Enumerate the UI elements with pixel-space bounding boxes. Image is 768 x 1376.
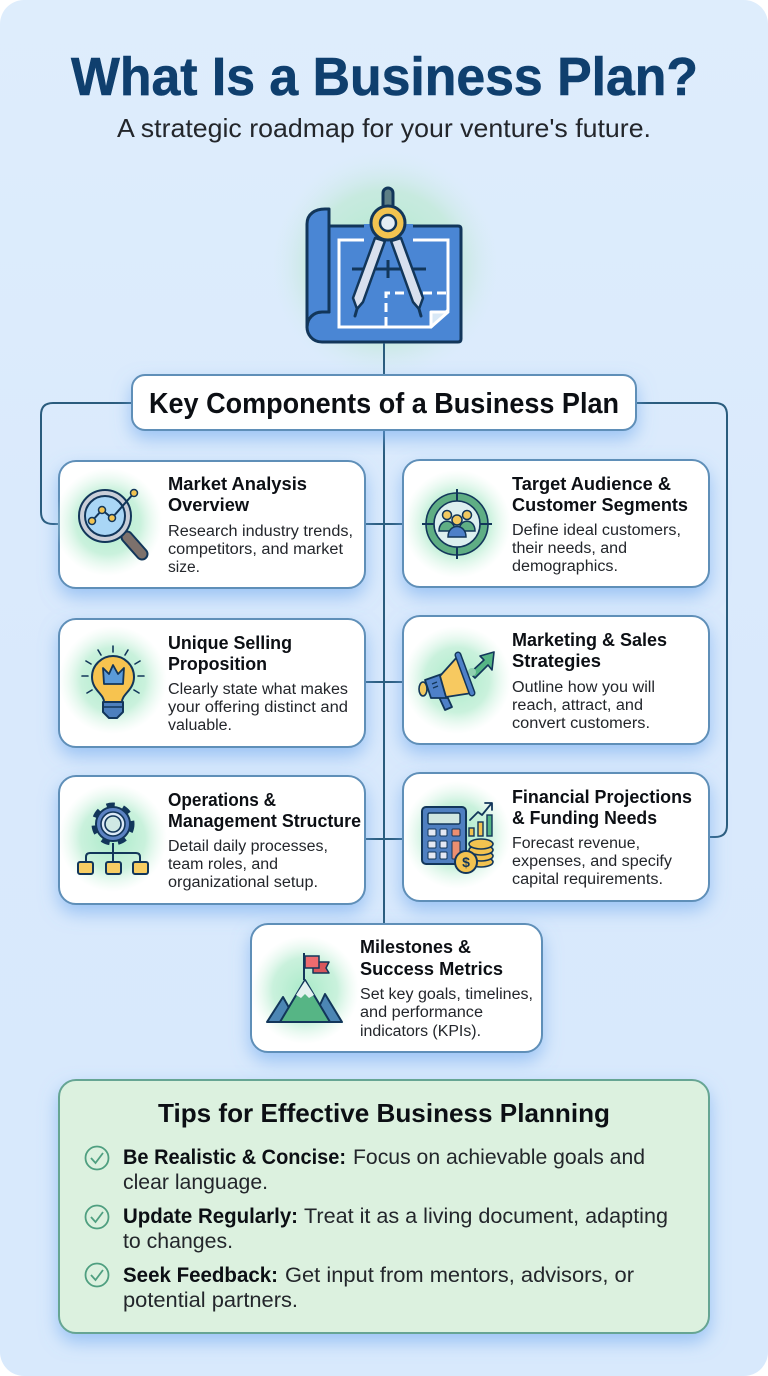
text: milestones: Set key goals, timelines, <box>360 986 533 1003</box>
icon: light bulb with crown <box>59 626 167 734</box>
text: financial projections: & Funding Needs <box>512 808 657 828</box>
heading: key components: Key Components of a Business Plan <box>149 388 619 420</box>
panel: milestones <box>251 924 542 1052</box>
icon: magnifier with chart <box>54 468 162 576</box>
icon: target with people <box>403 470 511 578</box>
text: milestones: Milestones & <box>360 937 471 957</box>
text: target audience: Target Audience & <box>512 474 671 494</box>
tip 1 <box>86 1146 645 1194</box>
text: market analysis <box>168 474 353 576</box>
text: operations and management: Operations & <box>168 790 276 810</box>
icon: gear with org chart <box>59 784 167 892</box>
panel: marketing and sales <box>403 616 709 744</box>
text: operations and management: organizational setup. <box>168 874 318 891</box>
tip 1: Be Realistic & Concise: <box>123 1146 346 1169</box>
text: target audience: demographics. <box>512 558 618 575</box>
text: milestones <box>360 937 533 1040</box>
panel: operations and management <box>59 776 365 904</box>
panel: financial projections <box>403 773 709 901</box>
text: operations and management <box>168 790 361 891</box>
heading: key components <box>132 375 636 430</box>
text: marketing and sales: Strategies <box>512 651 601 671</box>
text: market analysis: Research industry trends, <box>168 523 353 540</box>
tip 2 <box>86 1205 668 1253</box>
text: marketing and sales: Marketing & Sales <box>512 630 667 650</box>
text: marketing and sales <box>512 630 667 732</box>
tip 1: clear language. <box>123 1171 268 1194</box>
tips heading: Tips for Effective Business Planning <box>158 1098 610 1128</box>
panel: unique selling proposition <box>59 619 365 747</box>
text: unique selling proposition: Proposition <box>168 654 267 674</box>
panel: tips <box>59 1080 709 1333</box>
tip 1: Focus on achievable goals and <box>353 1146 645 1169</box>
text: target audience <box>512 474 688 575</box>
text: market analysis: Market Analysis <box>168 474 307 494</box>
icon: calculator, coins and chart <box>403 781 511 889</box>
text: unique selling proposition: valuable. <box>168 717 232 734</box>
text: unique selling proposition <box>168 633 348 734</box>
text: target audience: their needs, and <box>512 540 627 557</box>
tip 2: Update Regularly: <box>123 1205 298 1228</box>
text: marketing and sales: Outline how you will <box>512 679 655 696</box>
text: market analysis: size. <box>168 559 200 576</box>
subtitle: A strategic roadmap for your venture's future. <box>117 113 651 143</box>
tip 2: to changes. <box>123 1230 233 1253</box>
connector lines <box>41 343 727 924</box>
tip 3 <box>86 1264 634 1312</box>
panel: market analysis <box>54 461 365 588</box>
text: financial projections: Forecast revenue, <box>512 835 640 852</box>
text: market analysis: Overview <box>168 495 250 515</box>
tip 3: Get input from mentors, advisors, or <box>285 1264 634 1287</box>
text: operations and management: team roles, and <box>168 856 278 873</box>
tip 2: Treat it as a living document, adapting <box>304 1205 668 1228</box>
text: unique selling proposition: Clearly state what makes <box>168 681 348 698</box>
text: marketing and sales: reach, attract, and <box>512 697 643 714</box>
text: market analysis: competitors, and market <box>168 541 344 558</box>
text: target audience: Define ideal customers, <box>512 522 681 539</box>
text: milestones: and performance <box>360 1004 483 1021</box>
icon: blueprint and compass <box>270 150 500 380</box>
icon: calculator, coins and chart: $ <box>462 854 470 870</box>
text: target audience: Customer Segments <box>512 495 688 515</box>
text: marketing and sales: convert customers. <box>512 715 650 732</box>
text: financial projections: Financial Projections <box>512 787 692 807</box>
tip 3: Seek Feedback: <box>123 1264 278 1287</box>
text: operations and management: Management Structure <box>168 811 361 831</box>
text: operations and management: Detail daily processes, <box>168 838 328 855</box>
text: financial projections: capital requirements. <box>512 871 663 888</box>
panel: target audience <box>403 460 709 587</box>
icon: mountain with flag <box>251 936 359 1044</box>
text: milestones: indicators (KPIs). <box>360 1023 481 1040</box>
text: unique selling proposition: Unique Selling <box>168 633 292 653</box>
text: unique selling proposition: your offering distinct and <box>168 699 348 716</box>
text: milestones: Success Metrics <box>360 959 503 979</box>
icon: megaphone with arrow <box>403 626 511 734</box>
tip 3: potential partners. <box>123 1289 298 1312</box>
text: financial projections <box>512 787 692 888</box>
title: What Is a Business Plan? <box>71 47 698 107</box>
text: financial projections: expenses, and specify <box>512 853 672 870</box>
